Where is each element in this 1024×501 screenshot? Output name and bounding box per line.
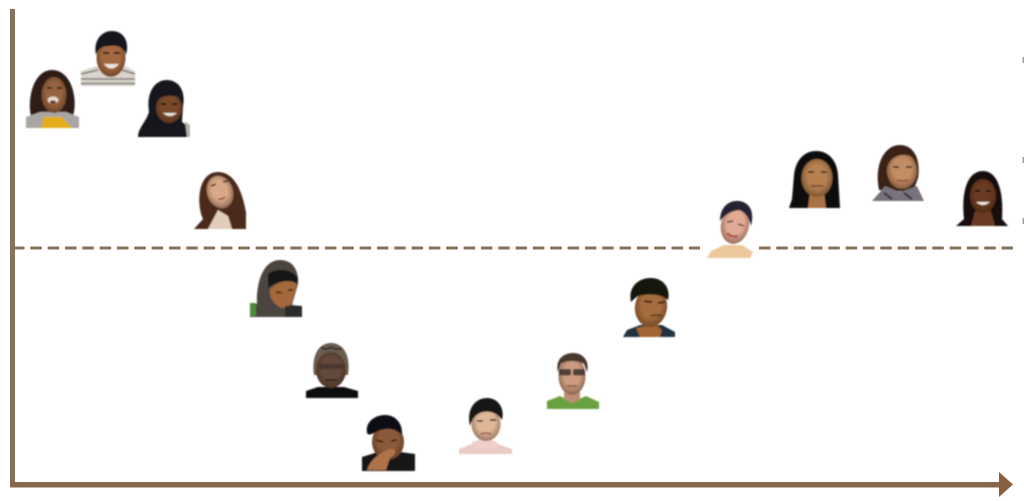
portrait: smiling woman in black hijab xyxy=(138,80,190,137)
portrait: man with dark hair, tilted head xyxy=(623,278,675,337)
portrait: woman in grey hijab looking down xyxy=(250,260,302,317)
portrait: man with glasses in green shirt xyxy=(547,353,599,409)
portrait: pale woman smiling with dark fringe xyxy=(707,201,753,258)
portrait: smiling woman with dark braids xyxy=(956,171,1008,226)
portrait: woman with braided hair, neutral face xyxy=(306,343,358,398)
vertical axis xyxy=(10,9,15,487)
clipped marks at right edge xyxy=(1022,57,1024,224)
dashed midline xyxy=(13,246,1013,250)
portrait: man holding hand to face xyxy=(362,415,415,471)
portrait: laughing woman xyxy=(26,70,79,128)
horizontal axis arrow xyxy=(10,472,1013,497)
portrait: woman in pink turtleneck xyxy=(459,398,512,454)
portrait: smiling man in striped shirt xyxy=(81,31,135,86)
portrait: woman with brown hair and grey scarf xyxy=(872,145,924,201)
portrait: woman with long brown hair looking up xyxy=(194,172,246,229)
portrait: woman with long straight black hair xyxy=(789,151,840,208)
